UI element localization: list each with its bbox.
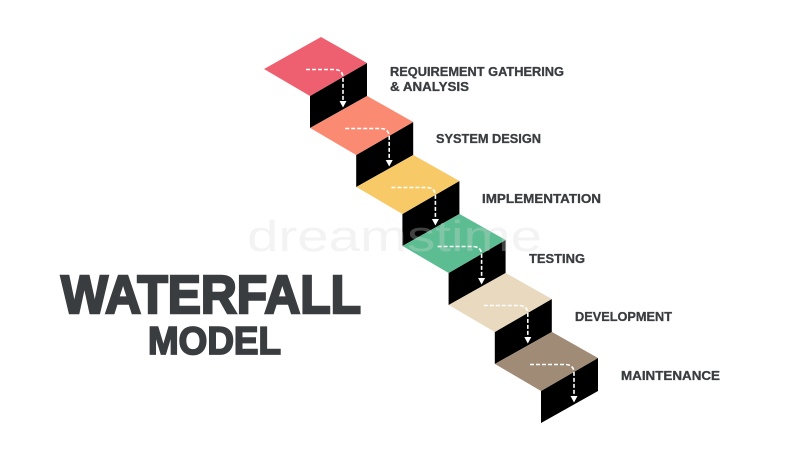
- label: testing: TESTING: [529, 251, 585, 266]
- step 2: system design: [310, 96, 413, 187]
- step 3: implementation: [356, 155, 459, 246]
- label: requirement gathering: & ANALYSIS: [390, 79, 469, 94]
- title: WATERFALL: [61, 265, 361, 325]
- watermark: dreamstime: [247, 212, 542, 261]
- step 1: requirement gathering: [264, 37, 367, 128]
- title: MODEL: [148, 320, 281, 363]
- step 5: development: [449, 273, 552, 364]
- label: implementation: IMPLEMENTATION: [482, 191, 601, 206]
- step 4: testing: [403, 214, 506, 305]
- step 6: maintenance: [495, 332, 598, 423]
- label: requirement gathering: [390, 64, 564, 94]
- title: [61, 265, 361, 363]
- label: requirement gathering: REQUIREMENT GATHERING: [390, 64, 564, 79]
- label: system design: SYSTEM DESIGN: [436, 131, 541, 146]
- label: maintenance: MAINTENANCE: [621, 368, 720, 383]
- label: development: DEVELOPMENT: [575, 309, 672, 324]
